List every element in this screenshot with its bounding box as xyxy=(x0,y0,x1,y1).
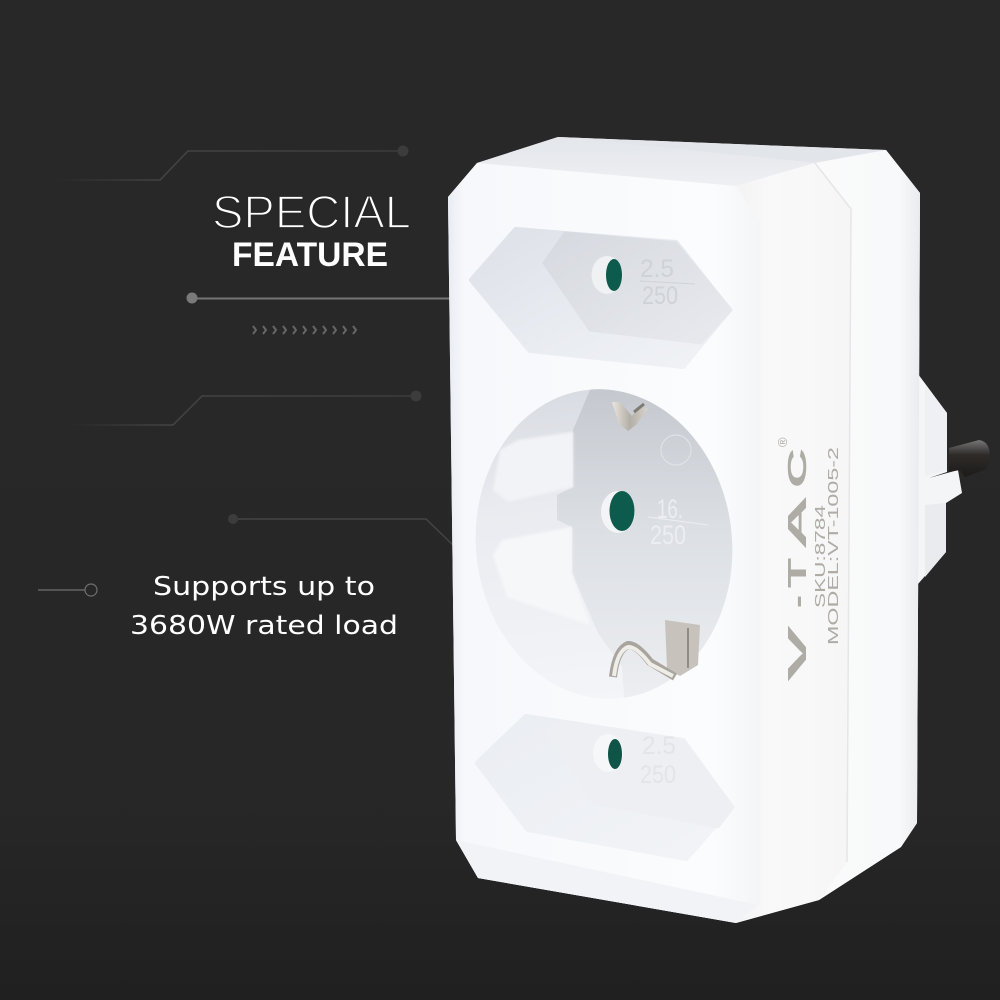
connector line: middle xyxy=(65,390,422,425)
heading: special feature: FEATURE xyxy=(232,236,388,274)
product: triple socket adapter xyxy=(448,137,990,923)
brand and model print: T xyxy=(782,558,812,588)
top euro socket: 250 xyxy=(642,282,678,310)
seam xyxy=(815,163,851,862)
earth clip: top xyxy=(612,402,648,431)
centre schuko socket: 250 xyxy=(650,520,686,550)
brand and model print xyxy=(775,437,842,682)
top euro socket xyxy=(472,230,731,366)
brand and model print: ® xyxy=(775,437,790,447)
guide notches xyxy=(493,432,573,502)
feature text: rated load xyxy=(130,572,398,641)
rating marking: 2.5 xyxy=(642,732,676,760)
heading: special feature xyxy=(212,186,411,274)
socket recess face xyxy=(557,389,732,681)
feature text: rated load: 3680W rated load xyxy=(130,611,398,641)
brand and model print: SKU:8784 xyxy=(812,505,829,608)
brand and model print: A xyxy=(782,494,812,550)
plug base xyxy=(918,374,990,584)
adapter body xyxy=(448,137,920,923)
brand and model print: MODEL:VT-1005-2 xyxy=(825,447,842,645)
chevron row xyxy=(253,326,356,334)
rating marking: 16. xyxy=(657,494,683,524)
earth clip: bottom xyxy=(613,620,700,677)
bottom euro socket: 250 xyxy=(640,761,676,789)
centre schuko socket xyxy=(476,389,732,698)
front face xyxy=(448,163,760,923)
connector line: heading divider xyxy=(186,292,452,304)
top face xyxy=(477,137,815,186)
earth symbol xyxy=(661,435,691,465)
feature text: rated load: Supports up to xyxy=(153,572,375,602)
connector line: top xyxy=(55,146,408,180)
heading: special feature: SPECIAL xyxy=(212,186,411,238)
brand and model print: C xyxy=(782,448,812,488)
rating marking: 2.5 xyxy=(640,255,674,283)
side faces xyxy=(736,163,851,923)
bottom euro socket xyxy=(478,717,733,858)
bullet marker xyxy=(38,584,97,596)
plug pin xyxy=(949,440,990,477)
connector line: to socket xyxy=(228,514,454,546)
brand and model print: - xyxy=(782,595,812,608)
brand and model print: V xyxy=(782,623,812,682)
